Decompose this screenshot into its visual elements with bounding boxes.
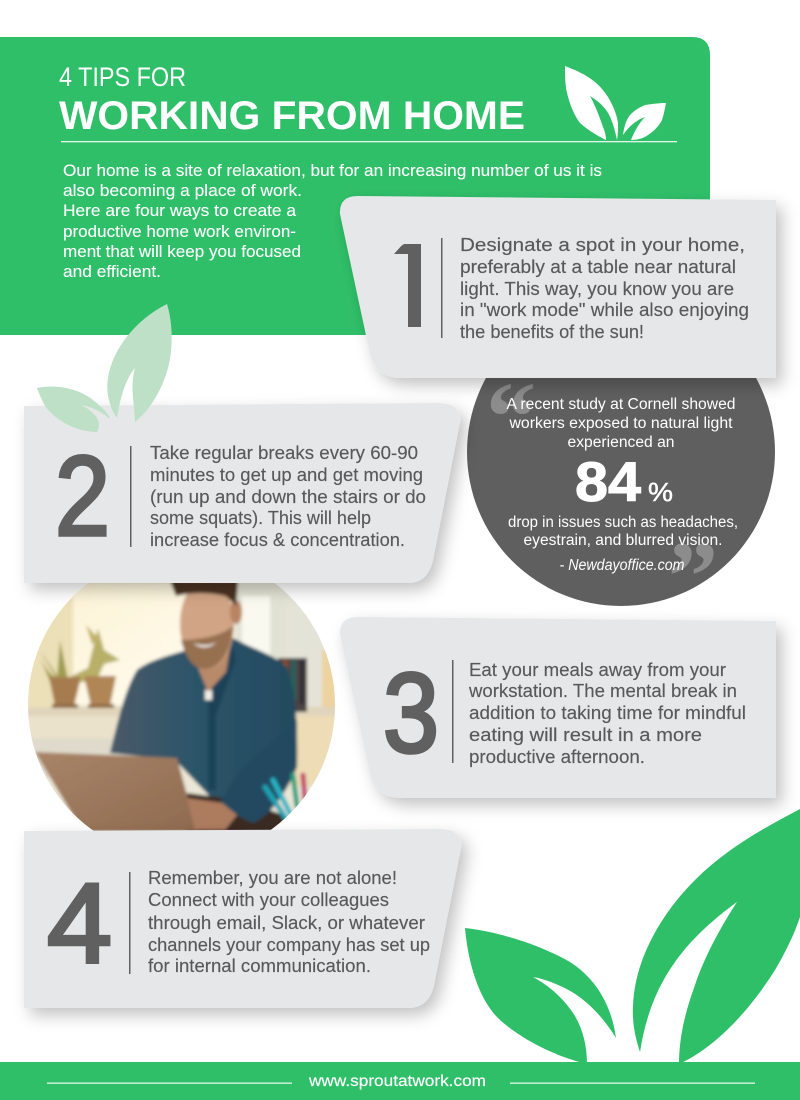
tip 4 text: Connect with your colleagues	[148, 890, 389, 910]
tip 4 text: Remember, you are not alone!	[148, 868, 397, 888]
shirt	[108, 636, 298, 800]
tip 1 text: preferably at a table near natural	[460, 257, 736, 277]
tip 1 text	[460, 235, 749, 342]
title: working from home: WORKING FROM HOME	[59, 94, 525, 138]
stat text: experienced an	[568, 434, 674, 451]
title line: 4 tips for: 4 TIPS FOR	[59, 62, 186, 92]
tip 3 text: productive afternoon.	[469, 747, 645, 767]
laptop	[35, 752, 197, 832]
tip card 3	[340, 617, 776, 798]
tip 2 text: some squats). This will help	[150, 508, 371, 528]
pens	[265, 775, 305, 820]
tip 1 text: the benefits of the sun!	[460, 322, 644, 342]
tip 4 text: channels your company has set up	[148, 935, 430, 955]
footer	[0, 1062, 800, 1100]
tip 4 text	[148, 868, 430, 976]
hair	[170, 580, 238, 606]
tip card 1	[340, 196, 776, 378]
tip card 2	[24, 403, 460, 583]
number 1: 1	[380, 219, 447, 353]
tip 3 text: addition to taking time for mindful	[469, 703, 746, 723]
tip 4 text: for internal communication.	[148, 956, 371, 976]
tip 2 text	[150, 443, 426, 550]
tip 1 text: light. This way, you know you are	[460, 279, 734, 299]
intro text: Our home is a site of relaxation, but for an increasing number of us it is	[63, 161, 602, 180]
intro text	[63, 161, 602, 281]
tip 1 text: Designate a spot in your home,	[460, 235, 745, 255]
footer url: www.sproutatwork.com	[308, 1073, 486, 1090]
tip 3 text	[468, 660, 746, 767]
icon: white leaves	[565, 66, 666, 140]
intro text: and efficient.	[63, 262, 161, 281]
pots	[49, 677, 81, 706]
number 2: 2	[55, 433, 110, 559]
stat text: workers exposed to natural light	[508, 415, 733, 432]
header panel	[0, 37, 710, 335]
stat text: A recent study at Cornell showed	[506, 396, 736, 413]
intro text: Here are four ways to create a	[63, 201, 297, 220]
photo: man working on laptop	[28, 583, 335, 831]
tip 3 text: Eat your meals away from your	[469, 660, 726, 680]
intro text: productive home work environ-	[63, 222, 296, 241]
books	[278, 658, 307, 712]
tip 4 text: through email, Slack, or whatever	[148, 913, 425, 933]
desk	[184, 791, 286, 830]
stat text: - Newdayoffice.com	[560, 557, 685, 574]
tip 1 text: in "work mode" while also enjoying	[460, 300, 749, 320]
tip card 4	[24, 829, 461, 1008]
tip 2 text: (run up and down the stairs or do	[150, 487, 426, 507]
plants	[38, 625, 120, 682]
quote mark close: ”	[668, 521, 718, 632]
quote mark open: “	[486, 361, 536, 472]
number 4: 4	[47, 860, 112, 986]
tip 2 text: Take regular breaks every 60-90	[150, 443, 418, 463]
icon: large green leaves	[465, 809, 800, 1064]
intro text: ment that will keep you focused	[63, 242, 301, 261]
intro text: also becoming a place of work.	[63, 181, 302, 200]
stat text: eyestrain, and blurred vision.	[524, 532, 722, 549]
stat circle	[467, 298, 775, 632]
tip 3 text: eating will result in a more	[469, 725, 702, 745]
tip 2 text: increase focus & concentration.	[150, 530, 405, 550]
number 3: 3	[383, 650, 439, 776]
icon: pale leaves	[37, 304, 172, 432]
sleeve	[218, 720, 297, 823]
tip 3 text: workstation. The mental break in	[468, 681, 737, 701]
stat text: %	[648, 477, 673, 507]
stat text	[506, 396, 738, 574]
tip 2 text: minutes to get up and get moving	[150, 465, 423, 485]
hand	[187, 798, 237, 830]
stat text: drop in issues such as headaches,	[508, 514, 738, 531]
neck and face	[196, 648, 233, 692]
stat text: 84	[575, 450, 641, 513]
